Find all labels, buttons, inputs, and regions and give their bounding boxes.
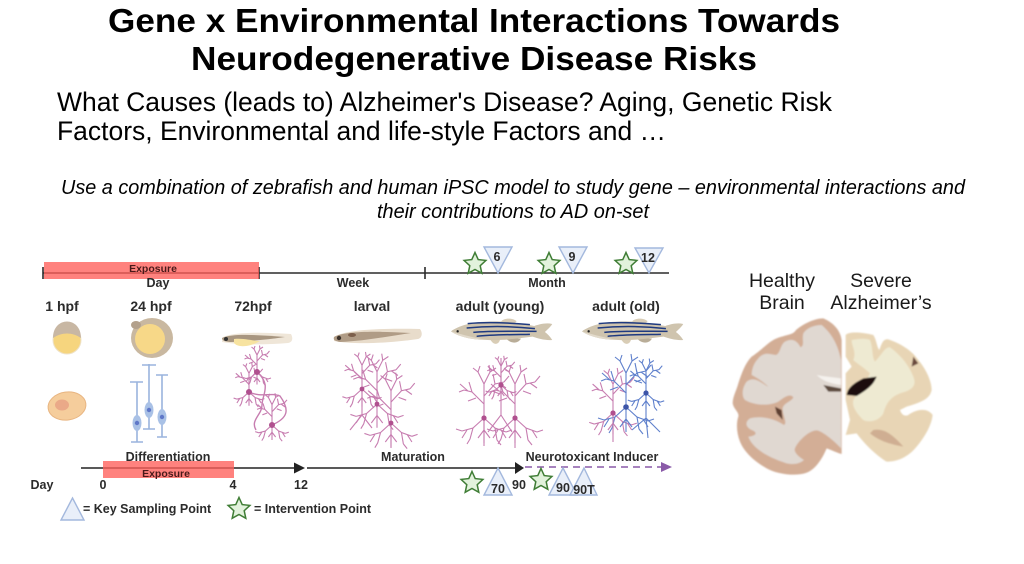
- lower triangles: 90T: [573, 483, 595, 497]
- healthy hemisphere: [733, 318, 842, 475]
- day labels: 4: [230, 478, 237, 492]
- sampling triangles: 12: [641, 251, 655, 265]
- phase labels: Differentiation: [126, 450, 210, 464]
- stage labels: 72hpf: [234, 298, 272, 314]
- larval neurons: [342, 352, 418, 449]
- exposure bar lower: [103, 461, 234, 478]
- larva: [334, 329, 422, 343]
- italic study description: [61, 176, 966, 223]
- sampling triangles: 9: [569, 250, 576, 264]
- title: Gene x Environmental Interactions Towards: [108, 3, 840, 40]
- stage labels: [45, 298, 660, 314]
- subtitle question: Factors, Environmental and life-style Factors and …: [57, 116, 666, 146]
- legend: [61, 498, 372, 520]
- stage labels: adult (young): [456, 298, 544, 314]
- scale labels: [147, 276, 566, 290]
- 72 hpf neurons: [234, 346, 289, 441]
- scale labels: Month: [528, 276, 566, 290]
- legend: = Intervention Point: [254, 502, 372, 516]
- stage labels: 1 hpf: [45, 298, 79, 314]
- scale labels: Week: [337, 276, 369, 290]
- intervention stars: [464, 252, 637, 273]
- exposure bar: [44, 262, 259, 279]
- blue progenitor neurons: [130, 364, 168, 442]
- day labels: 12: [294, 478, 308, 492]
- adult old zebrafish: [582, 319, 683, 344]
- stage labels: 24 hpf: [130, 298, 172, 314]
- adult young neurons: [456, 356, 543, 448]
- stage labels: larval: [354, 298, 390, 314]
- brain labels: Alzheimer’s: [830, 292, 932, 314]
- sampling triangles: 6: [494, 250, 501, 264]
- sampling triangles: [484, 247, 663, 273]
- lower stars: [461, 468, 552, 492]
- stage labels: adult (old): [592, 298, 660, 314]
- exposure label: Exposure: [129, 263, 177, 275]
- embryo 1 hpf: [53, 322, 81, 354]
- italic study description: Use a combination of zebrafish and human iPSC model to study gene – environmental interactions and: [61, 176, 966, 199]
- title: [108, 3, 840, 78]
- brain image: [733, 318, 933, 475]
- adult young zebrafish: [451, 319, 552, 344]
- brain labels: Brain: [759, 292, 805, 314]
- arrows: [81, 467, 516, 469]
- title: Neurodegenerative Disease Risks: [191, 41, 757, 78]
- scale labels: Day: [147, 276, 170, 290]
- legend: = Key Sampling Point: [83, 502, 212, 516]
- lower triangles: 90: [512, 478, 526, 492]
- zebrafish timeline: [43, 247, 669, 314]
- subtitle question: What Causes (leads to) Alzheimer's Disease? Aging, Genetic Risk: [57, 87, 833, 117]
- exposure label lower: Exposure: [142, 468, 190, 480]
- italic study description: their contributions to AD on-set: [377, 200, 650, 223]
- day labels: 0: [100, 478, 107, 492]
- lower triangles: [484, 468, 597, 497]
- adult old neurons: [589, 354, 664, 442]
- phase labels: [126, 450, 658, 464]
- brain labels: Healthy: [749, 270, 815, 292]
- larva 72 hpf: [222, 333, 292, 346]
- day labels: [31, 478, 308, 492]
- brain labels: Severe: [850, 270, 912, 292]
- timeline axis: [43, 267, 669, 279]
- phase labels: Neurotoxicant Inducer: [526, 450, 658, 464]
- brain labels: [749, 270, 932, 314]
- day labels: Day: [31, 478, 54, 492]
- iPSC cell: [46, 389, 88, 423]
- lower triangles: 70: [491, 482, 505, 496]
- alzheimer hemisphere: [846, 332, 933, 462]
- embryo 24 hpf: [131, 318, 173, 358]
- subtitle question: [57, 87, 833, 146]
- dashed purple arrow: [525, 466, 662, 468]
- iPSC timeline: [31, 450, 672, 497]
- lower triangles: 90: [556, 481, 570, 495]
- phase labels: Maturation: [381, 450, 445, 464]
